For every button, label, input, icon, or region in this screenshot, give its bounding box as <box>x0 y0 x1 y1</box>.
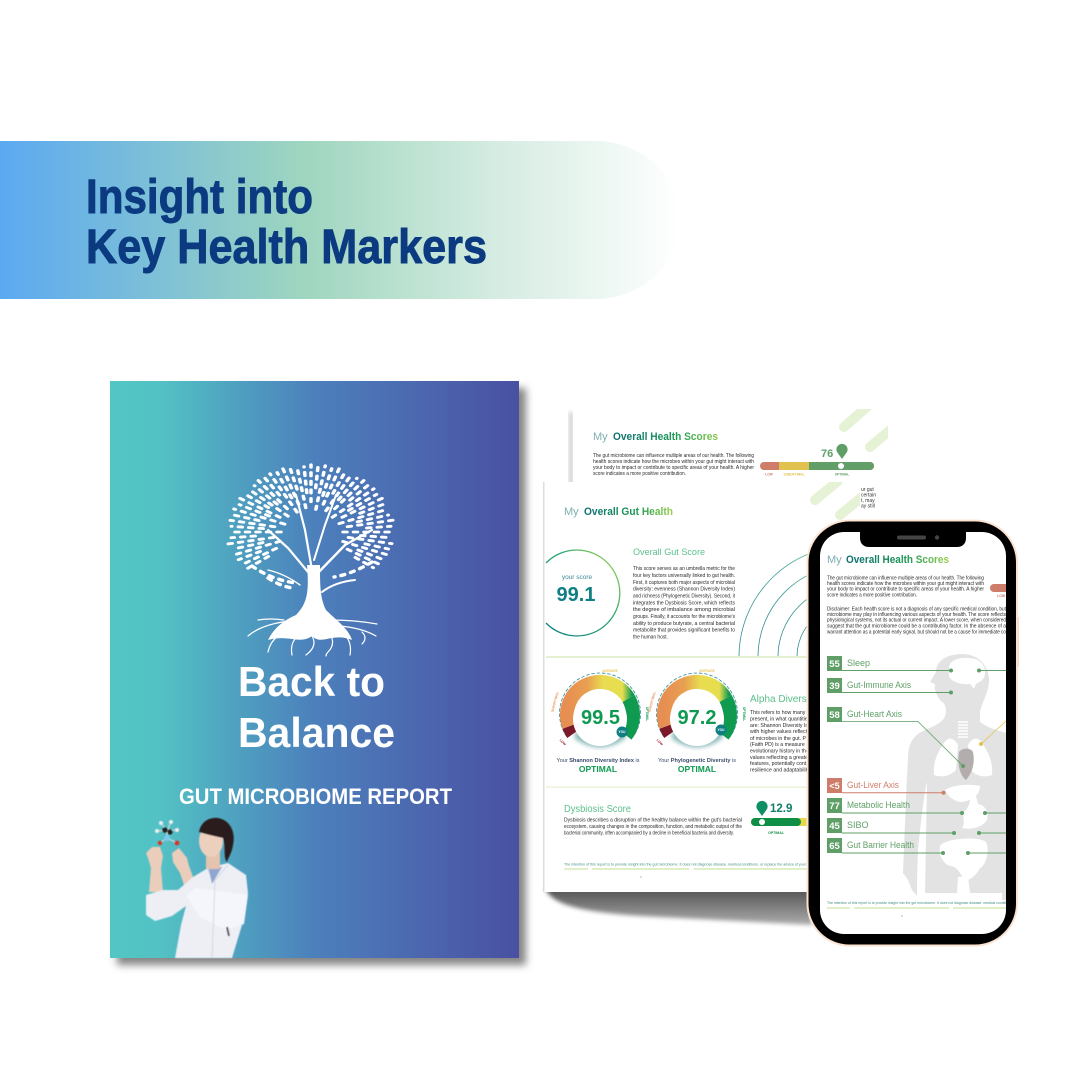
disclaimer fragment <box>858 484 888 520</box>
page title: Overall Gut Health <box>584 506 673 518</box>
spine <box>958 722 968 737</box>
banner <box>0 141 680 299</box>
gauge: phylogenetic diversity: SUBOPTIMAL <box>647 691 657 712</box>
page footer: The intention of this report is to provide insight into the gut microbiome. It does not diagnose disease, medical conditions, or replace the advice of your healthcare provider. <box>564 862 839 866</box>
molecule <box>155 820 179 845</box>
alpha diversity text: with higher values reflecting <box>750 729 814 735</box>
body silhouette <box>903 654 1006 900</box>
alpha diversity text: (Faith PD) is a measure of ric <box>750 742 818 748</box>
overall gut score text: the degree of imbalance among microbial <box>633 607 735 613</box>
decorative stripes <box>844 406 895 447</box>
tree leaves <box>228 465 394 569</box>
disclaimer text: warrant attention as a potential early signal, but should not be a cause for immediate co <box>827 630 1006 636</box>
intro text: health scores indicate how the microbes within your gut might interact with <box>827 581 984 587</box>
overall gut score text: the human host. <box>633 634 668 640</box>
screen title: Overall Health Scores <box>846 554 949 566</box>
intro text: score indicates a more positive contribution. <box>827 592 917 598</box>
heart axis connector <box>842 722 963 766</box>
phone screen <box>820 532 1006 934</box>
gauge: Shannon diversity: YOU <box>619 730 626 734</box>
overall gut score text: metabolite that provides significant benefits to <box>633 628 735 634</box>
intro text: score indicates a more positive contribution. <box>593 471 686 477</box>
marker: SIBO: 45 <box>829 821 840 832</box>
gauge: Shannon diversity: LOW <box>559 738 567 746</box>
score bar 76: LOW <box>765 472 773 476</box>
gauge: phylogenetic diversity: YOU <box>718 728 725 732</box>
side buttons <box>1017 617 1019 667</box>
gauge: Shannon diversity: SUBOPTIMAL <box>550 691 560 712</box>
marker: gut-heart axis: Gut-Heart Axis <box>847 709 902 719</box>
shadow under middle page <box>545 888 812 925</box>
marker: gut-immune axis <box>827 678 953 694</box>
disclaimer fragment: t, may <box>861 498 875 504</box>
intro text: your body to impact or contribute to specific areas of your health. A higher <box>827 586 984 592</box>
overall score circle: your score <box>562 574 593 581</box>
overall gut score text: ability to produce butyrate, a central bacterial <box>633 621 735 627</box>
page title: Overall Health Scores <box>613 431 718 443</box>
page title <box>564 507 672 518</box>
dysbiosis score text: ecosystem, causing changes in the composition, function, and metabolic output of the <box>564 824 742 830</box>
alpha diversity text: present, in what quantities and <box>750 716 820 722</box>
marker: sleep: Sleep <box>847 658 870 668</box>
gauge: Shannon diversity: AVERAGE <box>602 669 618 673</box>
overall gut score text: First, it captures both major aspects of microbial <box>633 580 735 586</box>
marker: SIBO: SIBO <box>847 820 869 830</box>
dysbiosis score text <box>564 804 742 836</box>
dysbiosis score bar <box>751 800 806 834</box>
alpha diversity text: of microbes in the gut. P <box>750 736 806 742</box>
marker: gut-heart axis <box>827 707 902 722</box>
screen title: My <box>827 554 842 566</box>
dysbiosis score text: Dysbiosis Score <box>564 804 631 815</box>
banner title: Insight into <box>86 171 313 224</box>
head <box>206 852 220 869</box>
marker: gut barrier health: 65 <box>829 841 840 852</box>
marker: gut-immune axis: 39 <box>829 681 840 692</box>
stomach <box>962 796 988 829</box>
marker: gut-liver axis: <5 <box>829 781 840 791</box>
report page: overall health scores (back) <box>568 409 888 508</box>
phone body <box>808 520 1017 946</box>
disclaimer fragment: ur gut <box>861 487 874 493</box>
alpha diversity text: resilience and adaptability of <box>750 768 816 774</box>
arms and hands <box>146 847 163 892</box>
marker: metabolic health <box>827 798 1006 815</box>
cover title <box>179 658 453 809</box>
intro text <box>593 453 754 477</box>
intro text: The gut microbiome can influence multiple areas of our health. The following <box>827 576 984 582</box>
score bar 76: SUBOPTIMAL <box>783 472 805 476</box>
gauge: Shannon diversity <box>550 669 649 774</box>
overall gut score text <box>633 547 736 640</box>
icon: tree logo <box>228 465 394 656</box>
lab coat <box>146 863 248 958</box>
brain <box>949 658 985 689</box>
page title: My <box>593 431 608 443</box>
decorative stripes <box>815 481 862 515</box>
report cover <box>110 381 519 958</box>
score bar 76 <box>760 444 874 476</box>
gauge: Shannon diversity: OPTIMAL <box>579 764 617 774</box>
banner title: Key Health Markers <box>86 221 487 274</box>
dysbiosis score text: Dysbiosis describes a disruption of the healthy balance within the gut's bacterial <box>564 818 742 824</box>
overall gut score text: diversity: evenness (Shannon Diversity Index) <box>633 586 735 592</box>
cover title: Back to <box>238 658 385 705</box>
marker: metabolic health: 77 <box>829 801 840 812</box>
marker: sleep <box>827 656 1006 672</box>
marker: sleep: 55 <box>829 659 840 670</box>
low range bar <box>990 584 1006 597</box>
disclaimer text: suggest that the gut microbiome could be a contributing factor. In the absence of a <box>827 624 1006 630</box>
yellow connector <box>981 721 1006 744</box>
disclaimer fragment: ay still <box>861 504 875 510</box>
intestines <box>940 839 988 880</box>
disclaimer fragment: certain <box>861 492 876 498</box>
gauge: phylogenetic diversity: Your Phylogenetic Diversity is <box>658 758 736 764</box>
overall gut score text: integrates the Dysbiosis Score, which reflects <box>633 600 735 606</box>
intro text <box>827 576 984 598</box>
gauge: phylogenetic diversity <box>647 669 746 774</box>
alpha diversity text: features, potentially contri <box>750 761 809 767</box>
intro text: your body to impact or contribute to specific areas of your health. A higher <box>593 465 754 471</box>
alpha diversity text <box>750 694 806 772</box>
page title: My <box>564 506 579 518</box>
screen title <box>828 555 949 566</box>
marker: gut-liver axis <box>827 778 946 795</box>
dysbiosis score bar: OPTIMAL <box>768 831 785 835</box>
intro text: health scores indicate how the microbes within your gut might interact with <box>593 459 754 465</box>
overall score circle <box>546 550 620 636</box>
overall gut score text: This score serves as an umbrella metric for the <box>633 566 735 572</box>
alpha diversity text: Alpha Diversity <box>750 694 817 705</box>
disclaimer text: physiological systems, not its actual or current impact. A lower score, when considered <box>827 618 1006 624</box>
gauge: phylogenetic diversity: OPTIMAL <box>678 764 716 774</box>
alpha diversity text: are: Shannon Diversity Index <box>750 723 817 729</box>
disclaimer text: Disclaimer: Each health score is not a diagnosis of any specific medical condition, but <box>827 606 1007 612</box>
phone notch <box>860 532 966 547</box>
marker: metabolic health: Metabolic Health <box>847 800 910 810</box>
heart <box>958 749 974 780</box>
gauge: Shannon diversity: OPTIMAL <box>645 707 649 721</box>
overall gut score text: Overall Gut Score <box>633 547 705 558</box>
dysbiosis score text: bacterial community, often accompanied by a decline in beneficial bacteria and diversity. <box>564 830 734 836</box>
phone mockup <box>806 520 1019 946</box>
marker: SIBO <box>827 818 1006 835</box>
illustration: scientist holding molecule <box>146 818 248 958</box>
concentric arcs <box>738 554 808 656</box>
dysbiosis score bar: 12.9 <box>770 803 792 815</box>
gauge: phylogenetic diversity: AVERAGE <box>699 669 715 673</box>
marker: gut-heart axis: 58 <box>829 710 840 721</box>
marker: gut barrier health: Gut Barrier Health <box>847 840 914 850</box>
marker: gut barrier health <box>827 838 1006 855</box>
overall score circle: 99.1 <box>557 584 595 606</box>
alpha diversity text: evolutionary history in the co <box>750 748 816 754</box>
disclaimer text: microbiome may play in influencing various aspects of your health. The score reflects <box>827 612 1006 618</box>
lungs <box>934 739 958 776</box>
cover title: Balance <box>238 709 395 756</box>
gauge: Shannon diversity: Your Shannon Diversity Index is <box>556 758 640 764</box>
gauge: phylogenetic diversity: OPTIMAL <box>742 707 746 721</box>
report page: overall gut health <box>543 481 862 892</box>
overall gut score text: four key factors universally linked to gut health. <box>633 573 735 579</box>
marker: gut-immune axis: Gut-Immune Axis <box>847 680 911 690</box>
gauge: phylogenetic diversity: LOW <box>656 738 664 746</box>
cover shadow <box>117 388 526 965</box>
alpha diversity text: This refers to how many different <box>750 710 826 716</box>
gauge: phylogenetic diversity: 97.2 <box>678 707 716 729</box>
tree trunk and roots <box>248 565 377 656</box>
overall gut score text: groups. Finally, it accounts for the microbiome's <box>633 614 735 620</box>
intro text: The gut microbiome can influence multiple areas of our health. The following <box>593 453 754 459</box>
overall gut score text: and richness (Phylogenetic Diversity). Second, it <box>633 594 736 600</box>
score bar 76: OPTIMAL <box>835 472 849 476</box>
low range bar: LOW <box>997 594 1006 598</box>
alpha diversity text: values reflecting a greater v <box>750 755 814 761</box>
score bar 76: 76 <box>821 448 833 460</box>
gauge: Shannon diversity: 99.5 <box>581 707 620 729</box>
marker: gut-liver axis: Gut-Liver Axis <box>847 780 899 790</box>
cover subtitle: GUT MICROBIOME REPORT <box>179 784 453 809</box>
disclaimer text <box>827 606 1007 636</box>
liver <box>945 785 980 802</box>
banner title <box>86 171 487 274</box>
